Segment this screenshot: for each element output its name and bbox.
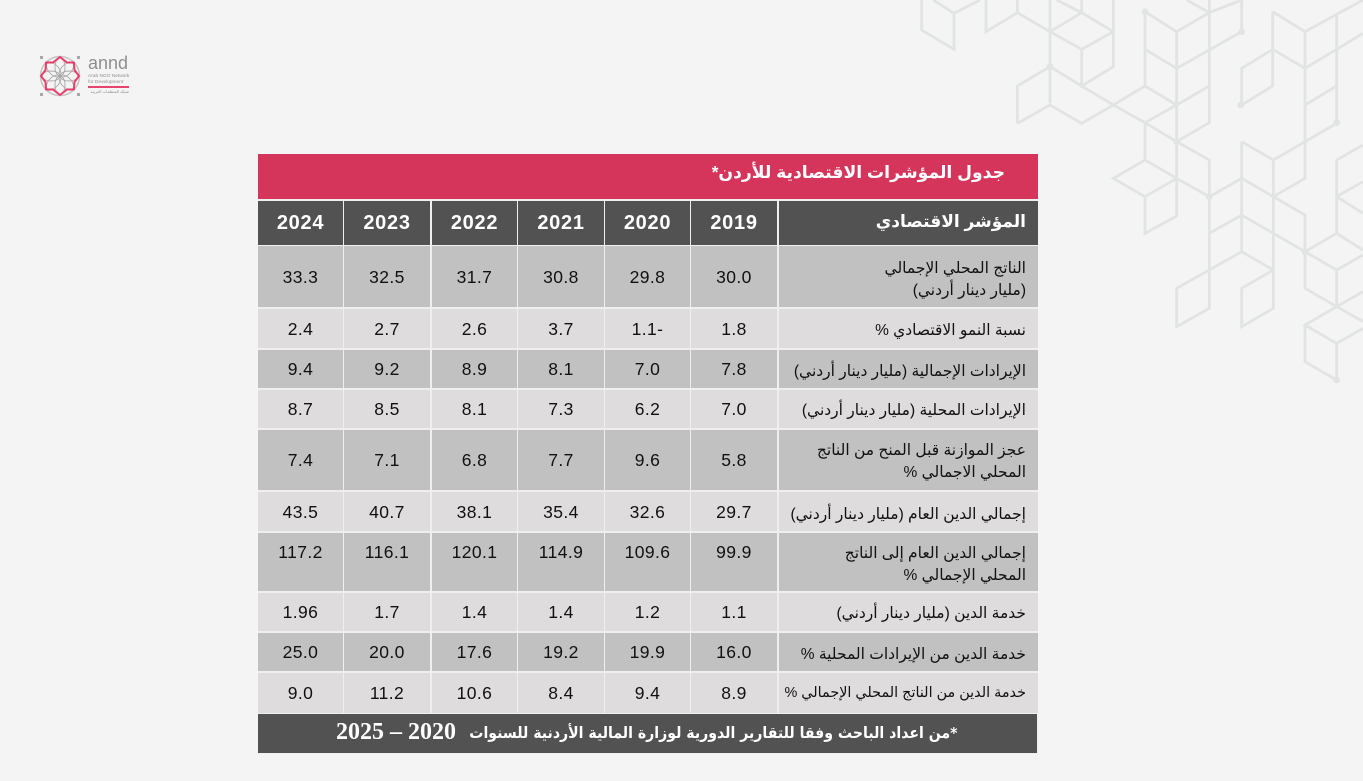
row: GDP: 31.7 <box>457 266 492 286</box>
row: growth rate: 1.8 <box>721 318 747 338</box>
row: domestic revenue: 7.0 <box>721 399 747 419</box>
row: debt service to GDP: 9.4 <box>635 683 660 703</box>
row: debt service to GDP: 8.9 <box>721 683 747 703</box>
row: debt service to domestic revenue <box>258 633 1038 671</box>
row: debt to GDP: 117.2 <box>278 542 323 562</box>
row: domestic revenue: 6.2 <box>635 399 660 419</box>
header row: 2021 <box>537 212 585 234</box>
row: total revenue: 8.1 <box>548 359 574 379</box>
row: total revenue <box>258 350 1038 388</box>
row: debt service to domestic revenue: 19.9 <box>630 642 665 662</box>
row: debt service: خدمة الدين (مليار دينار أردني) <box>836 605 1026 622</box>
row: debt service: 1.96 <box>283 602 318 622</box>
row: total public debt <box>258 492 1038 531</box>
row: debt service: 1.4 <box>462 602 487 622</box>
logo: annd <box>40 53 130 96</box>
row: debt service to domestic revenue: 17.6 <box>457 642 492 662</box>
row: GDP <box>258 246 1038 307</box>
logo wordmark <box>88 53 130 94</box>
logo wordmark: for Development <box>88 80 123 84</box>
logo wordmark: annd <box>88 53 128 73</box>
row: budget deficit: عجز الموازنة قبل المنح من الناتج <box>817 442 1026 459</box>
row: total public debt: 32.6 <box>630 502 665 522</box>
row: growth rate: 3.7 <box>548 318 574 338</box>
row: debt to GDP: 109.6 <box>625 542 670 562</box>
row: budget deficit: 9.6 <box>635 450 660 470</box>
row: growth rate: 2.7 <box>374 318 400 338</box>
row: debt to GDP: 116.1 <box>365 542 409 562</box>
row: GDP: 29.8 <box>630 266 665 286</box>
header row: 2023 <box>363 212 411 234</box>
row: debt service to domestic revenue: 19.2 <box>543 642 579 662</box>
row: domestic revenue: 8.5 <box>374 399 400 419</box>
row: domestic revenue: 8.1 <box>462 399 487 419</box>
row: debt to GDP: 99.9 <box>716 542 752 562</box>
row: debt service: 1.2 <box>635 602 660 622</box>
row: total public debt: 43.5 <box>283 502 318 522</box>
row: debt service to domestic revenue: خدمة الدين من الإيرادات المحلية % <box>801 646 1026 663</box>
header row: 2020 <box>624 212 671 234</box>
row: total public debt: 38.1 <box>457 502 492 522</box>
row: budget deficit: المحلي الاجمالي % <box>904 464 1026 481</box>
row: GDP: الناتج المحلي الإجمالي <box>885 260 1026 277</box>
row: debt service <box>258 593 1038 631</box>
table title banner <box>258 154 1038 199</box>
row: domestic revenue: 8.7 <box>288 399 313 419</box>
row: debt service: 1.7 <box>374 602 400 622</box>
row: budget deficit: 7.1 <box>374 450 400 470</box>
footnote source bar <box>258 714 1037 753</box>
row: total revenue: 9.2 <box>374 359 400 379</box>
row: GDP: 30.8 <box>543 266 579 286</box>
row: debt to GDP <box>258 533 1038 591</box>
logo wordmark: شبكة المنظمات العربية <box>90 89 129 94</box>
row: budget deficit: 7.4 <box>288 450 313 470</box>
footnote source bar: 2025 – 2020 <box>336 719 456 745</box>
row: debt service to domestic revenue: 25.0 <box>283 642 318 662</box>
row: debt service to GDP: خدمة الدين من الناتج المحلي الإجمالي % <box>784 685 1026 701</box>
row: total revenue: 8.9 <box>462 359 487 379</box>
row: total revenue: 7.0 <box>635 359 660 379</box>
logo wordmark: Arab NGO Network <box>88 74 129 79</box>
header row: 2019 <box>710 212 758 234</box>
header row: المؤشر الاقتصادي <box>876 212 1026 231</box>
row: GDP: (مليار دينار أردني) <box>913 282 1026 299</box>
row: domestic revenue <box>258 390 1038 428</box>
row: total revenue: 9.4 <box>288 359 313 379</box>
row: budget deficit <box>258 430 1038 490</box>
icon: rosette <box>40 56 80 96</box>
header row <box>258 201 1038 245</box>
row: total public debt: 29.7 <box>716 502 752 522</box>
row: debt service to GDP: 11.2 <box>370 683 404 703</box>
row: debt service: 1.1 <box>721 602 747 622</box>
header row: 2022 <box>451 212 498 234</box>
row: growth rate: 1.1- <box>632 318 663 338</box>
footnote source bar: *من اعداد الباحث وفقا للتقارير الدورية لوزارة المالية الأردنية للسنوات <box>470 724 958 742</box>
row: total public debt: 40.7 <box>369 502 405 522</box>
row: debt service to GDP: 10.6 <box>457 683 492 703</box>
row: total public debt: إجمالي الدين العام (مليار دينار أردني) <box>790 506 1026 523</box>
row: debt service to GDP: 9.0 <box>288 683 313 703</box>
row: debt to GDP: 114.9 <box>539 542 583 562</box>
row: budget deficit: 5.8 <box>721 450 747 470</box>
background hexagon pattern <box>920 0 1363 384</box>
row: debt to GDP: إجمالي الدين العام إلى الناتج <box>845 545 1026 562</box>
row: debt to GDP: المحلي الإجمالي % <box>904 567 1026 584</box>
row: debt service to domestic revenue: 20.0 <box>369 642 405 662</box>
row: GDP: 33.3 <box>283 266 318 286</box>
row: total public debt: 35.4 <box>543 502 579 522</box>
row: GDP: 32.5 <box>369 266 405 286</box>
row: debt service to GDP <box>258 673 1038 713</box>
row: domestic revenue: الإيرادات المحلية (مليار دينار أردني) <box>802 402 1026 419</box>
row: total revenue: الإيرادات الإجمالية (مليار دينار أردني) <box>794 363 1026 380</box>
row: debt service to GDP: 8.4 <box>548 683 574 703</box>
row: debt service to domestic revenue: 16.0 <box>716 642 752 662</box>
table: Jordan economic indicators <box>258 154 1038 754</box>
row: budget deficit: 7.7 <box>548 450 574 470</box>
row: budget deficit: 6.8 <box>462 450 487 470</box>
row: domestic revenue: 7.3 <box>548 399 574 419</box>
row: GDP: 30.0 <box>716 266 752 286</box>
row: growth rate: 2.4 <box>288 318 313 338</box>
row: growth rate: 2.6 <box>462 318 487 338</box>
row: total revenue: 7.8 <box>721 359 747 379</box>
table title banner: جدول المؤشرات الاقتصادية للأردن* <box>712 162 1005 182</box>
row: growth rate <box>258 309 1038 348</box>
header row: 2024 <box>277 212 324 234</box>
row: growth rate: نسبة النمو الاقتصادي % <box>875 322 1026 339</box>
row: debt to GDP: 120.1 <box>452 542 497 562</box>
row: debt service: 1.4 <box>548 602 574 622</box>
